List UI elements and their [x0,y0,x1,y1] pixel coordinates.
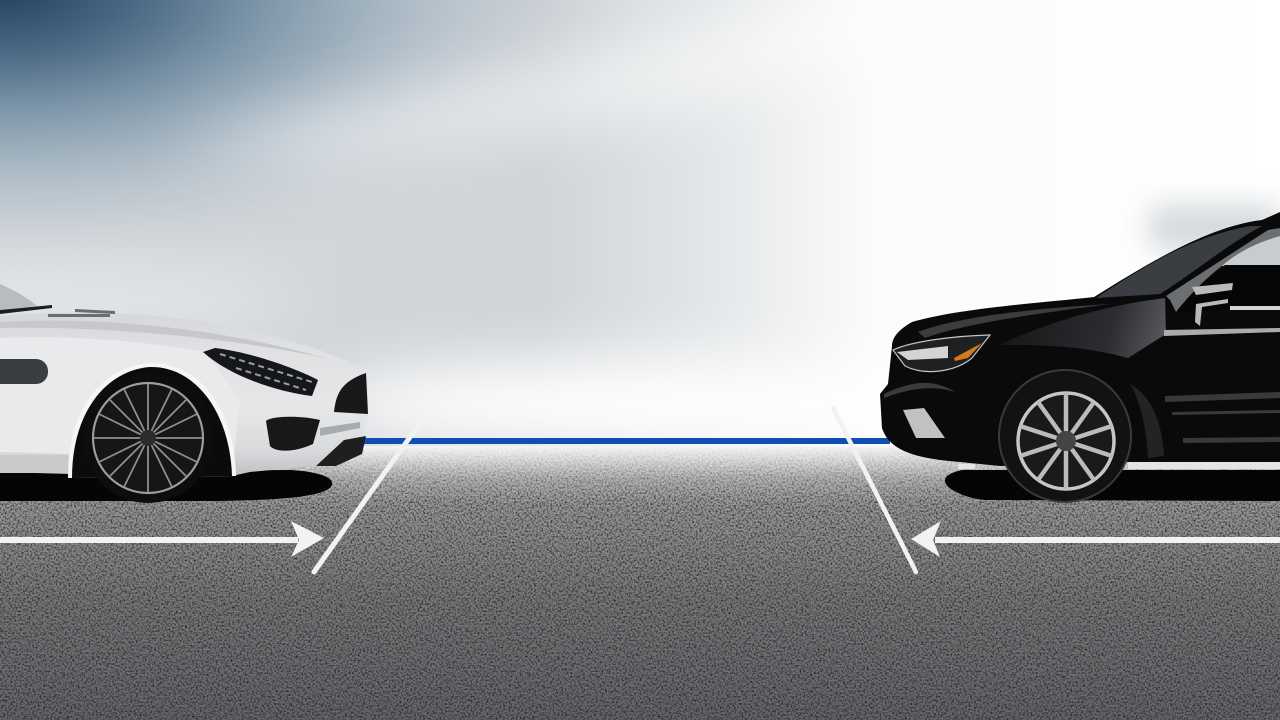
left stop line [314,416,425,572]
windshield [1096,226,1262,298]
right arrow pointing left [911,521,1280,557]
road surface [0,446,1280,720]
body [880,212,1280,466]
wheel [999,370,1131,502]
side vent [0,359,48,384]
hood vents [48,309,115,317]
fog lamp [903,408,945,438]
window [0,284,37,310]
front grille [334,373,368,414]
front bumper highlight [884,383,955,398]
front lower arch trim [1130,384,1164,458]
window base [0,305,52,314]
light sill strip [958,462,1280,469]
body [0,313,368,476]
headlight [893,335,990,372]
lower air intake [266,417,320,451]
hood crease [0,320,325,358]
lower sill [0,455,68,473]
pillar [1166,228,1280,312]
door lower strips [1165,392,1280,443]
background sky [0,0,1280,450]
blue boundary line [362,438,890,444]
car shadow [0,470,332,501]
side panel [0,337,240,474]
fender highlight [1000,298,1166,358]
headlight [203,348,318,396]
mirror [1178,265,1280,326]
white car [0,284,368,503]
left arrow pointing right [0,521,324,557]
lower lip [320,422,360,436]
right stop line [833,408,916,572]
wheel [68,363,236,503]
black SUV [880,212,1280,502]
door upper panel [1164,328,1280,336]
suv shadow [945,470,1280,501]
hood creases [918,304,1110,338]
side window [1222,236,1280,266]
